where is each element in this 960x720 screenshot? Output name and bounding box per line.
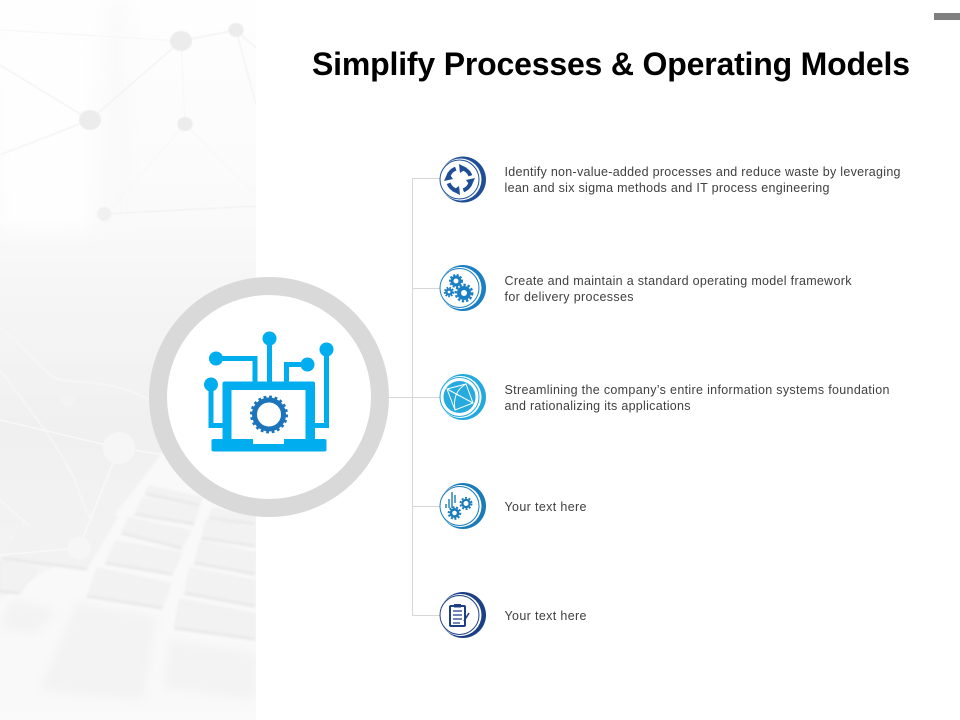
text: Your text here bbox=[504, 609, 587, 623]
central ring icon bbox=[158, 286, 380, 508]
text: Create and maintain a standard operating model framework bbox=[504, 274, 852, 288]
text: Your text here bbox=[504, 500, 587, 514]
keyboard keys bbox=[0, 485, 256, 640]
item 4: chart and gears icon and text bbox=[440, 483, 587, 529]
icon: network globe bbox=[440, 374, 486, 420]
text bbox=[504, 274, 852, 304]
connector lines bbox=[388, 178, 440, 616]
hand outline bbox=[0, 328, 150, 540]
text bbox=[504, 383, 890, 413]
keyboard bed bbox=[156, 456, 170, 466]
text bbox=[504, 165, 901, 195]
icon: laptop with circuit wires and gear bbox=[204, 332, 334, 452]
text: Identify non-value-added processes and reduce waste by leveraging bbox=[504, 165, 901, 179]
text: for delivery processes bbox=[504, 290, 634, 304]
network lines bbox=[1, 32, 256, 150]
item 2: gears icon and text bbox=[440, 265, 852, 311]
text: lean and six sigma methods and IT process engineering bbox=[504, 181, 830, 195]
text: Streamlining the company’s entire information systems foundation bbox=[504, 383, 890, 397]
text: and rationalizing its applications bbox=[504, 399, 690, 413]
icon: bars and gears bbox=[440, 483, 486, 529]
network nodes bbox=[79, 23, 244, 221]
icon: circular arrows bbox=[440, 156, 486, 202]
corner tab bbox=[934, 13, 960, 20]
item 1: recycle arrows icon and text bbox=[440, 156, 901, 202]
title: Simplify Processes & Operating Models bbox=[312, 46, 910, 82]
icon: clipboard checklist bbox=[440, 592, 486, 638]
background photo panel: hand on keyboard with network bbox=[0, 0, 256, 720]
item 5: clipboard icon and text bbox=[440, 592, 587, 638]
item 3: globe icon and text bbox=[440, 374, 890, 420]
icon: gears bbox=[440, 265, 486, 311]
